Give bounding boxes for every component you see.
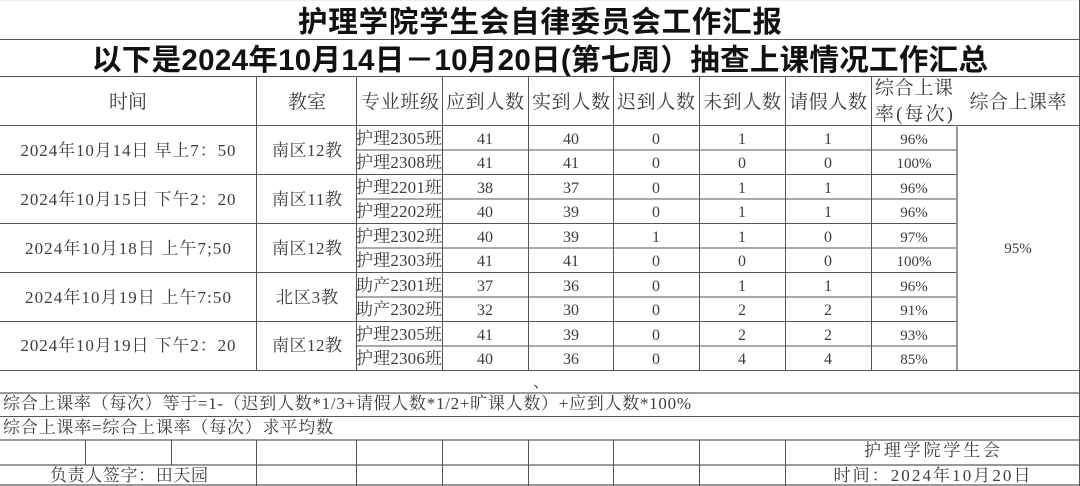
table header: 综合上课 — [875, 77, 953, 99]
class attendance data: 护理2303班 — [356, 251, 442, 270]
class attendance data: 100% — [896, 254, 932, 270]
class attendance data: 0 — [824, 229, 832, 246]
session rows: time and classroom: 北区3教 — [276, 288, 338, 307]
class attendance data: 40 — [477, 351, 493, 368]
class attendance data: 32 — [477, 302, 493, 319]
class attendance data: 2 — [738, 327, 746, 344]
class attendance data: 助产2302班 — [356, 300, 442, 319]
session rows: time and classroom — [20, 140, 342, 355]
class attendance data: 4 — [824, 351, 832, 368]
table header: 请假人数 — [789, 91, 867, 113]
class attendance data: 0 — [652, 351, 660, 368]
class attendance data: 0 — [738, 253, 746, 270]
class attendance data: 37 — [563, 180, 579, 197]
class attendance data: 41 — [563, 253, 579, 270]
session rows: time and classroom: 南区11教 — [272, 190, 342, 209]
class attendance data: 1 — [738, 180, 746, 197]
subtitle: 以下是2024年10月14日－10月20日(第七周）抽查上课情况工作汇总 — [92, 44, 988, 77]
table header: 迟到人数 — [617, 91, 695, 113]
overall attendance rate: 95% — [1004, 241, 1032, 257]
session rows: time and classroom: 南区12教 — [272, 239, 342, 258]
class attendance data: 41 — [477, 131, 493, 148]
class attendance data: 1 — [738, 229, 746, 246]
signature: 负责人签字：田天园 — [50, 466, 208, 485]
class attendance data: 96% — [900, 181, 928, 197]
report date: 时间：2024年10月20日 — [834, 465, 1030, 485]
class attendance data: 4 — [738, 351, 746, 368]
class attendance data: 40 — [477, 204, 493, 221]
class attendance data: 2 — [738, 302, 746, 319]
class attendance data: 91% — [900, 303, 928, 319]
class attendance data: 0 — [652, 278, 660, 295]
stray mark: 、 — [533, 374, 549, 391]
class attendance data: 30 — [563, 302, 579, 319]
class attendance data: 40 — [563, 131, 579, 148]
class attendance data: 0 — [652, 155, 660, 172]
class attendance data: 0 — [652, 131, 660, 148]
table header: 率(每次) — [875, 103, 953, 125]
class attendance data: 2 — [824, 302, 832, 319]
class attendance data: 护理2308班 — [356, 153, 442, 172]
class attendance data: 1 — [738, 204, 746, 221]
class attendance data: 1 — [824, 278, 832, 295]
class attendance data: 85% — [900, 352, 928, 368]
organisation name: 护理学院学生会 — [864, 441, 1000, 460]
class attendance data: 36 — [563, 278, 579, 295]
session rows: time and classroom: 2024年10月15日 下午2：20 — [20, 189, 236, 209]
class attendance data: 41 — [477, 155, 493, 172]
table header: 教室 — [288, 91, 326, 113]
class attendance data: 1 — [738, 278, 746, 295]
average note: 综合上课率=综合上课率（每次）求平均数 — [3, 418, 333, 437]
session rows: time and classroom: 南区12教 — [272, 141, 342, 160]
class attendance data: 0 — [652, 204, 660, 221]
class attendance data: 41 — [477, 253, 493, 270]
class attendance data: 40 — [477, 229, 493, 246]
class attendance data: 护理2202班 — [356, 202, 442, 221]
table header — [109, 77, 1066, 125]
title: 护理学院学生会自律委员会工作汇报 — [298, 6, 782, 39]
class attendance data: 护理2201班 — [356, 178, 442, 197]
formula note: 综合上课率（每次）等于=1-（迟到人数*1/3+请假人数*1/2+旷课人数）+应到人数*100% — [3, 394, 691, 413]
class attendance data: 1 — [824, 131, 832, 148]
class attendance data: 37 — [477, 278, 493, 295]
class attendance data: 1 — [824, 204, 832, 221]
class attendance data: 96% — [900, 132, 928, 148]
class attendance data: 0 — [652, 180, 660, 197]
class attendance data: 39 — [563, 327, 579, 344]
session rows: time and classroom: 2024年10月19日 上午7:50 — [25, 287, 231, 307]
table header: 时间 — [109, 91, 147, 113]
class attendance data: 41 — [563, 155, 579, 172]
class attendance data: 护理2306班 — [356, 349, 442, 368]
table header: 综合上课率 — [970, 91, 1066, 113]
class attendance data: 护理2305班 — [356, 129, 442, 148]
class attendance data: 36 — [563, 351, 579, 368]
table header: 专业班级 — [361, 91, 439, 113]
session rows: time and classroom: 2024年10月18日 上午7;50 — [25, 238, 231, 258]
class attendance data: 0 — [824, 155, 832, 172]
class attendance data: 41 — [477, 327, 493, 344]
class attendance data: 2 — [824, 327, 832, 344]
class attendance data: 39 — [563, 204, 579, 221]
class attendance data: 1 — [652, 229, 660, 246]
class attendance data: 0 — [824, 253, 832, 270]
class attendance data: 护理2305班 — [356, 325, 442, 344]
class attendance data: 0 — [652, 253, 660, 270]
class attendance data: 39 — [563, 229, 579, 246]
class attendance data: 1 — [738, 131, 746, 148]
class attendance data: 96% — [900, 279, 928, 295]
class attendance data: 0 — [652, 302, 660, 319]
table header: 应到人数 — [446, 91, 524, 113]
class attendance data: 38 — [477, 180, 493, 197]
class attendance data: 0 — [652, 327, 660, 344]
session rows: time and classroom: 南区12教 — [272, 336, 342, 355]
table header: 未到人数 — [703, 91, 781, 113]
class attendance data: 93% — [900, 328, 928, 344]
class attendance data — [356, 129, 932, 368]
class attendance data: 97% — [900, 230, 928, 246]
session rows: time and classroom: 2024年10月19日 下午2：20 — [20, 335, 236, 355]
table header: 实到人数 — [532, 91, 610, 113]
class attendance data: 96% — [900, 205, 928, 221]
class attendance data: 护理2302班 — [356, 227, 442, 246]
class attendance data: 0 — [738, 155, 746, 172]
class attendance data: 100% — [896, 156, 932, 172]
class attendance data: 助产2301班 — [356, 276, 442, 295]
class attendance data: 1 — [824, 180, 832, 197]
session rows: time and classroom: 2024年10月14日 早上7：50 — [20, 140, 236, 160]
